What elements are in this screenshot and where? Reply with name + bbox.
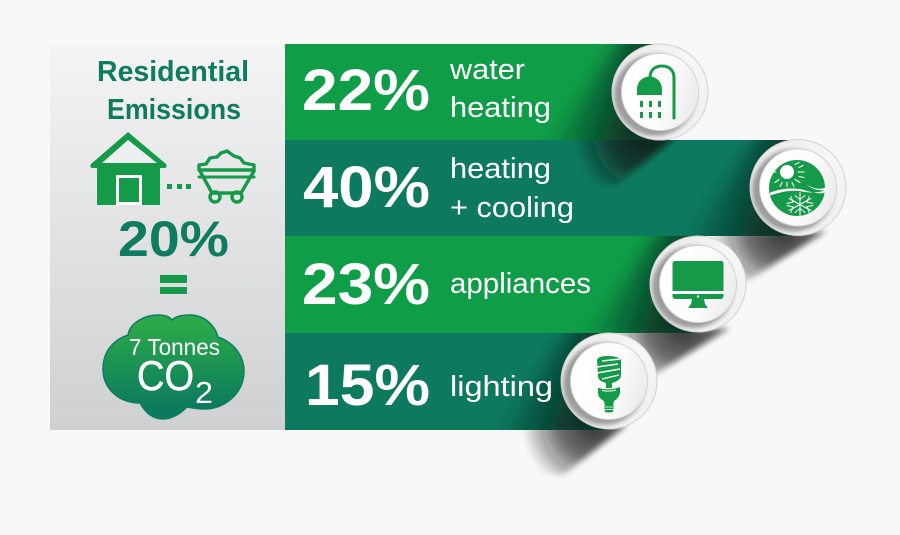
value: 23%: 23% [302,252,430,317]
icon: light bulb [597,356,621,412]
bar: appliances [285,236,698,333]
label: lighting: lighting [450,371,553,403]
button: monitor [650,236,746,332]
equals sign [160,275,187,294]
icon: dots [167,184,191,189]
heading: residential emissions: Residential [97,56,249,88]
label: water heating: water [449,54,525,86]
bar: lighting [285,333,609,430]
shadows cast on background [509,232,826,475]
bar: water heating [285,44,654,140]
label: water heating: heating [450,92,551,124]
value: 15%: 15% [305,353,430,418]
heading: residential emissions: Emissions [107,94,241,126]
infographic [50,44,846,478]
label: appliances: appliances [450,268,591,300]
value: 40%: 40% [303,155,430,220]
icon: coal cart [199,151,254,202]
button: light bulb [561,333,657,429]
cloud: 7 tonnes CO2: 2 [195,375,213,410]
label: heating + cooling [450,153,574,224]
label: water heating [449,54,551,124]
bar: heating + cooling [285,140,796,236]
icon: house [90,132,167,205]
cloud: 7 tonnes CO2: CO [137,352,194,399]
icon: monitor [672,261,724,308]
panel: residential emissions [50,44,285,430]
cloud: 7 tonnes CO2 [103,315,244,419]
icon: shower head [637,66,674,118]
heading: residential emissions [97,56,249,126]
value: 22%: 22% [302,58,430,123]
icon: sun and snowflake [769,160,826,216]
label: heating + cooling: + cooling [450,192,574,224]
label: heating + cooling: heating [450,153,551,185]
text: 20%: 20% [118,211,229,267]
cloud: 7 tonnes CO2: 7 Tonnes [129,334,220,360]
button: shower [612,44,708,140]
button: sun and snow [750,140,846,236]
